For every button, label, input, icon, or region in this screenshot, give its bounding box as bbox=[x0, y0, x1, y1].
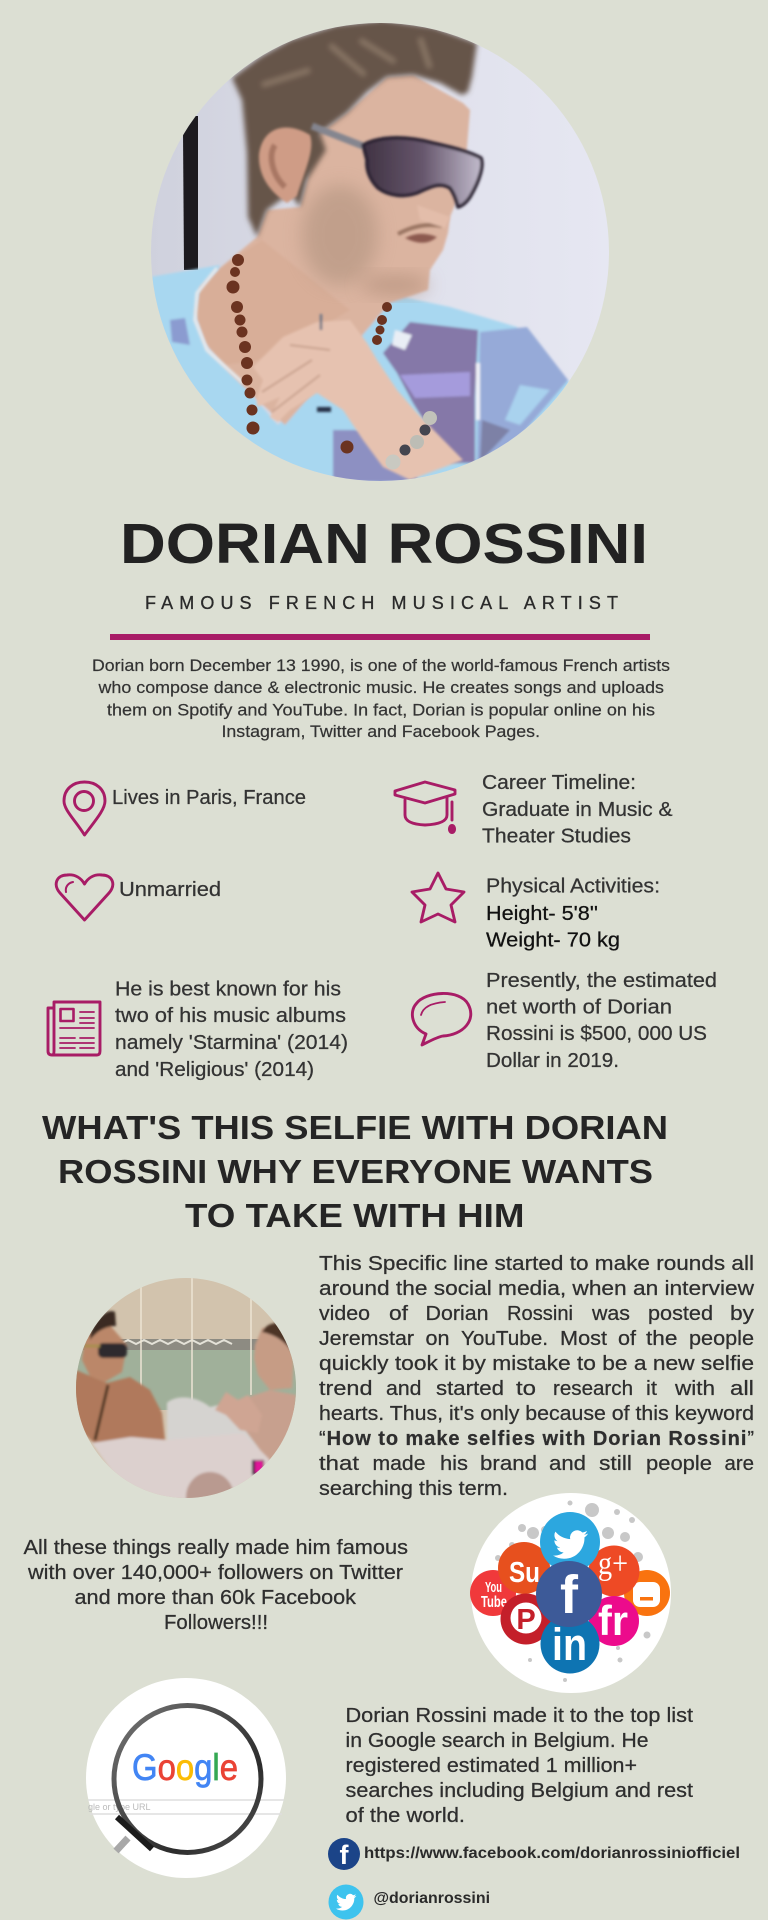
selfie body text: of bbox=[618, 1328, 636, 1350]
selfie body text bbox=[319, 1253, 755, 1500]
icon: heart bbox=[56, 875, 113, 920]
fact: career timeline: Theater Studies bbox=[482, 826, 631, 848]
selfie body text: are bbox=[724, 1453, 754, 1475]
icon: stumbleupon: Su bbox=[509, 1557, 540, 1589]
selfie body text: YouTube. bbox=[461, 1328, 548, 1350]
bathtub photo bbox=[76, 1278, 296, 1498]
fact: career timeline bbox=[482, 772, 673, 848]
portrait photo: Dorian Rossini bbox=[150, 20, 610, 500]
subtitle: FAMOUS FRENCH MUSICAL ARTIST bbox=[145, 593, 618, 613]
selfie body text: the bbox=[646, 1328, 678, 1350]
icon: blogger bbox=[624, 1570, 670, 1616]
selfie body text: on bbox=[426, 1328, 450, 1350]
fact: residence: Lives in Paris, France bbox=[112, 787, 306, 809]
selfie body text: was bbox=[591, 1303, 630, 1325]
heading: selfie section: WHAT'S THIS SELFIE WITH DORIAN bbox=[42, 1109, 668, 1146]
google logo: Google bbox=[132, 1747, 238, 1788]
selfie body text: Dorian bbox=[426, 1303, 488, 1325]
selfie body text: by bbox=[730, 1303, 754, 1325]
selfie body text: still bbox=[599, 1453, 632, 1475]
intro paragraph: Dorian born December 13 1990, is one of the world-famous French artists bbox=[92, 657, 670, 675]
selfie body text: his bbox=[440, 1453, 468, 1475]
selfie body text: research bbox=[553, 1378, 633, 1400]
selfie body text: started bbox=[436, 1378, 504, 1400]
icon: facebook bbox=[536, 1561, 602, 1627]
fact: marital status: Unmarried bbox=[119, 879, 221, 901]
fact: net worth bbox=[486, 970, 717, 1072]
icon: youtube bbox=[470, 1570, 516, 1616]
fact: best known albums: He is best known for his bbox=[115, 979, 341, 1001]
icon: stumbleupon bbox=[498, 1542, 550, 1594]
google search text: Dorian Rossini made it to the top list bbox=[346, 1705, 693, 1727]
selfie body text: Rossini bbox=[507, 1303, 573, 1325]
icon: youtube: You bbox=[485, 1579, 502, 1596]
selfie body text: around the social media, when an interview bbox=[319, 1278, 755, 1300]
google search text: searches including Belgium and rest bbox=[346, 1780, 693, 1802]
google search text: of the world. bbox=[346, 1805, 465, 1827]
icon: pinterest: P bbox=[516, 1604, 536, 1636]
fact: career timeline: Career Timeline: bbox=[482, 772, 636, 794]
icon: facebook badge bbox=[328, 1838, 360, 1870]
fact: net worth: Rossini is $500, 000 US bbox=[486, 1023, 707, 1045]
selfie body text: quickly took it by mistake to be a new selfie bbox=[319, 1353, 754, 1375]
fact: physical stats: Physical Activities: bbox=[486, 876, 660, 898]
heading: selfie section: ROSSINI WHY EVERYONE WANTS bbox=[58, 1153, 653, 1190]
heading: selfie section: TO TAKE WITH HIM bbox=[185, 1197, 524, 1234]
selfie body text: trend bbox=[319, 1378, 372, 1400]
fact: career timeline: Graduate in Music & bbox=[482, 799, 673, 821]
icon: linkedin bbox=[540, 1614, 600, 1674]
icon: location pin bbox=[64, 782, 105, 835]
fame text: Followers!!! bbox=[164, 1612, 268, 1634]
selfie body text: made bbox=[372, 1453, 426, 1475]
divider rule bbox=[110, 634, 650, 640]
fact: physical stats bbox=[486, 876, 660, 952]
selfie body text: all bbox=[730, 1378, 754, 1400]
fact: best known albums bbox=[115, 979, 348, 1081]
selfie body text: Jeremstar bbox=[319, 1328, 414, 1350]
icon: twitter bbox=[540, 1512, 600, 1572]
icon: newspaper bbox=[48, 1002, 100, 1055]
intro paragraph: them on Spotify and YouTube. In fact, Dorian is popular online on his bbox=[107, 702, 655, 720]
selfie body text: of bbox=[389, 1303, 408, 1325]
icon: fr bbox=[589, 1596, 639, 1646]
social media logos circle bbox=[470, 1493, 671, 1693]
selfie body text: Most bbox=[560, 1328, 607, 1350]
icon: twitter badge bbox=[328, 1884, 364, 1920]
icon: graduation cap bbox=[395, 782, 455, 832]
icon: star bbox=[412, 873, 464, 922]
selfie body text: This Specific line started to make rounds all bbox=[319, 1253, 754, 1275]
selfie body text: and bbox=[386, 1378, 422, 1400]
selfie body text: people bbox=[689, 1328, 754, 1350]
google search text: in Google search in Belgium. He bbox=[346, 1730, 648, 1752]
selfie body text: “How to make selfies with Dorian Rossini” bbox=[319, 1428, 754, 1450]
icon: pinterest bbox=[500, 1594, 552, 1644]
selfie body text: people bbox=[646, 1453, 712, 1475]
fame text: and more than 60k Facebook bbox=[74, 1587, 357, 1609]
google search text: registered estimated 1 million+ bbox=[346, 1755, 637, 1777]
fact: net worth: Dollar in 2019. bbox=[486, 1050, 619, 1072]
selfie body text: brand bbox=[480, 1453, 537, 1475]
icon: google plus bbox=[588, 1546, 640, 1596]
selfie body text: that bbox=[319, 1453, 360, 1475]
icon: linkedin: in bbox=[552, 1619, 587, 1670]
selfie body text: to bbox=[516, 1378, 536, 1400]
fact: best known albums: two of his music albums bbox=[115, 1005, 346, 1027]
heading: selfie section bbox=[42, 1109, 668, 1234]
fact: best known albums: and 'Religious' (2014) bbox=[115, 1059, 314, 1081]
selfie body text: and bbox=[549, 1453, 586, 1475]
icon: facebook: f bbox=[560, 1565, 579, 1625]
intro paragraph bbox=[92, 657, 670, 741]
selfie body text: hearts. Thus, it's only because of this keyword bbox=[319, 1403, 754, 1425]
intro paragraph: Instagram, Twitter and Facebook Pages. bbox=[222, 723, 540, 741]
fame text bbox=[24, 1537, 408, 1634]
google magnifier circle bbox=[86, 1678, 286, 1878]
fact: net worth: Presently, the estimated bbox=[486, 970, 717, 992]
fame text: with over 140,000+ followers on Twitter bbox=[27, 1562, 403, 1584]
fame text: All these things really made him famous bbox=[24, 1537, 408, 1559]
intro paragraph: who compose dance & electronic music. He creates songs and uploads bbox=[97, 679, 664, 697]
facebook url: https://www.facebook.com/dorianrossiniofficiel bbox=[364, 1845, 740, 1862]
icon: speech bubble bbox=[412, 993, 471, 1045]
selfie body text: with bbox=[674, 1378, 715, 1400]
google search text bbox=[346, 1705, 693, 1827]
icon: fr: fr bbox=[598, 1597, 628, 1644]
selfie body text: video bbox=[319, 1303, 370, 1325]
fact: physical stats: Height- 5'8'' bbox=[486, 903, 598, 925]
icon: google plus: g+ bbox=[598, 1546, 628, 1582]
google magnifier circle: gle or type URL bbox=[88, 1802, 151, 1812]
selfie body text: it bbox=[646, 1378, 657, 1400]
selfie body text: searching this term. bbox=[319, 1478, 508, 1500]
fact: best known albums: namely 'Starmina' (2014) bbox=[115, 1032, 348, 1054]
fact: net worth: net worth of Dorian bbox=[486, 997, 672, 1019]
selfie body text: posted bbox=[648, 1303, 713, 1325]
twitter handle: @dorianrossini bbox=[374, 1890, 490, 1907]
icon: facebook badge: f bbox=[340, 1840, 350, 1870]
title: DORIAN ROSSINI bbox=[120, 512, 648, 576]
icon: youtube: Tube bbox=[481, 1594, 507, 1611]
fact: physical stats: Weight- 70 kg bbox=[486, 930, 620, 952]
